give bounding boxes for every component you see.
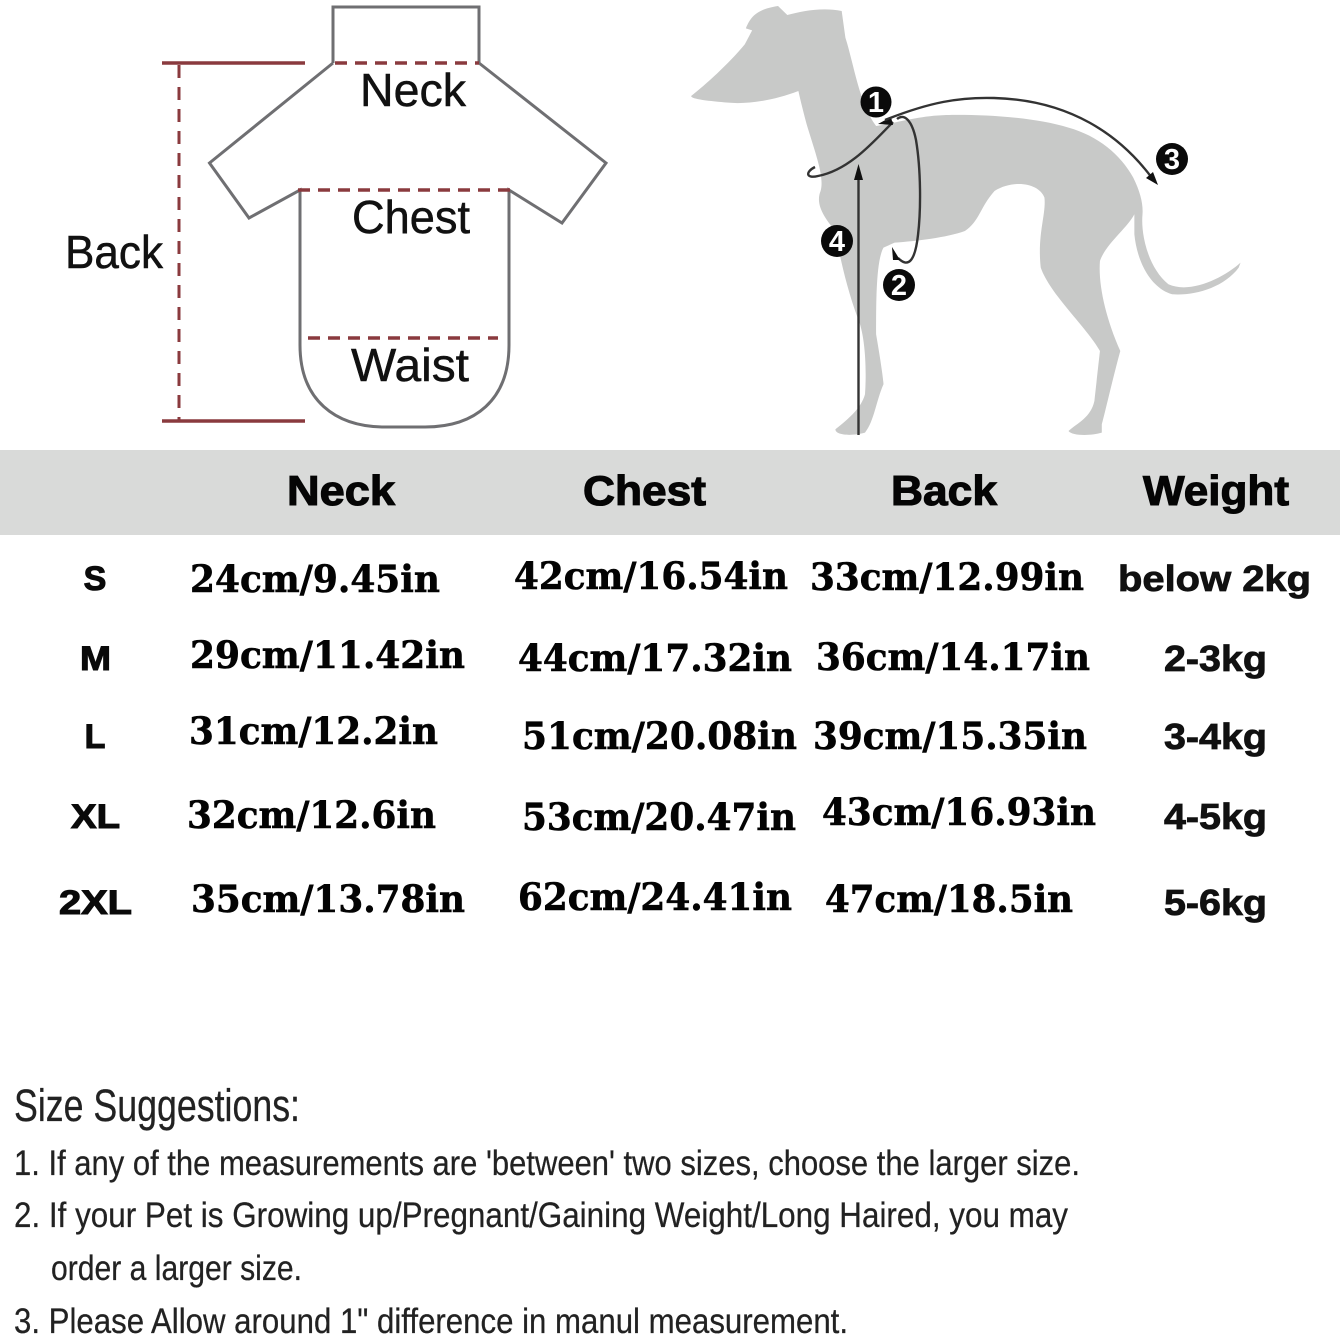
suggestion 2 continued: order a larger size. xyxy=(51,1249,302,1288)
row M: M xyxy=(80,640,111,678)
dog silhouette xyxy=(691,6,1241,435)
waist dashed line xyxy=(308,336,498,340)
row XL: 4-5kg xyxy=(1164,796,1267,837)
row L: L xyxy=(85,718,105,756)
size suggestions text block xyxy=(14,1080,1080,1340)
row L: 31cm/12.2in xyxy=(189,709,438,753)
row 2XL: 47cm/18.5in xyxy=(825,877,1073,921)
row M: 2-3kg xyxy=(1164,638,1267,679)
row L: 39cm/15.35in xyxy=(813,714,1087,758)
label: chest: Chest xyxy=(352,191,470,243)
row XL: XL xyxy=(71,798,120,836)
suggestion 2: 2. If your Pet is Growing up/Pregnant/Gaining Weight/Long Haired, you may xyxy=(14,1196,1068,1235)
panel: dog measurement diagram xyxy=(691,6,1241,435)
back length arrow xyxy=(885,98,1158,185)
row XL: 32cm/12.6in xyxy=(187,793,436,837)
row S: S xyxy=(84,560,106,598)
row M: 44cm/17.32in xyxy=(518,636,792,680)
row 2XL: 2XL xyxy=(59,884,132,922)
table header band xyxy=(0,450,1340,535)
marker 2 xyxy=(883,269,915,302)
label: neck: Neck xyxy=(360,64,467,116)
row L: 51cm/20.08in xyxy=(522,714,797,758)
row L: 3-4kg xyxy=(1164,716,1267,757)
row S: 33cm/12.99in xyxy=(810,555,1084,599)
chest measurement loop xyxy=(892,117,920,263)
marker 1: 1 xyxy=(868,87,884,119)
row 2XL: 5-6kg xyxy=(1164,882,1267,923)
back measure bracket xyxy=(162,63,305,421)
marker 1 xyxy=(860,86,892,119)
row XL xyxy=(71,790,1267,839)
row 2XL: 62cm/24.41in xyxy=(518,875,792,919)
marker 4 xyxy=(821,225,853,258)
row 2XL: 35cm/13.78in xyxy=(191,877,465,921)
row 2XL xyxy=(59,875,1267,923)
table header band: Chest xyxy=(583,467,706,514)
height arrow xyxy=(854,164,863,435)
marker 3: 3 xyxy=(1164,144,1180,176)
label: back: Back xyxy=(65,226,164,278)
row S: 24cm/9.45in xyxy=(190,557,440,601)
row S: 42cm/16.54in xyxy=(514,554,788,598)
suggestion 1: 1. If any of the measurements are 'between' two sizes, choose the larger size. xyxy=(14,1144,1080,1183)
row XL: 53cm/20.47in xyxy=(522,795,796,839)
marker 2: 2 xyxy=(891,270,907,302)
table header band: Back xyxy=(891,467,998,514)
neck measurement loop xyxy=(808,117,893,177)
marker 4: 4 xyxy=(829,226,845,258)
chest dashed line xyxy=(298,188,510,192)
row S: below 2kg xyxy=(1118,558,1311,599)
row L xyxy=(85,709,1267,758)
neck dashed line xyxy=(335,61,479,65)
row M: 36cm/14.17in xyxy=(816,635,1090,679)
label: waist: Waist xyxy=(351,339,469,391)
suggestion 3: 3. Please Allow around 1" difference in manul measurement. xyxy=(14,1302,848,1340)
marker 3 xyxy=(1156,143,1188,176)
row M xyxy=(80,633,1267,680)
row XL: 43cm/16.93in xyxy=(822,790,1096,834)
garment outline xyxy=(210,7,606,427)
row S xyxy=(84,554,1311,601)
panel: garment measurement diagram xyxy=(65,7,606,427)
table header band: Neck xyxy=(287,467,396,514)
table header band: Weight xyxy=(1143,467,1289,514)
row M: 29cm/11.42in xyxy=(190,633,465,677)
size table xyxy=(0,450,1340,923)
suggestions heading: Size Suggestions: xyxy=(14,1080,300,1131)
